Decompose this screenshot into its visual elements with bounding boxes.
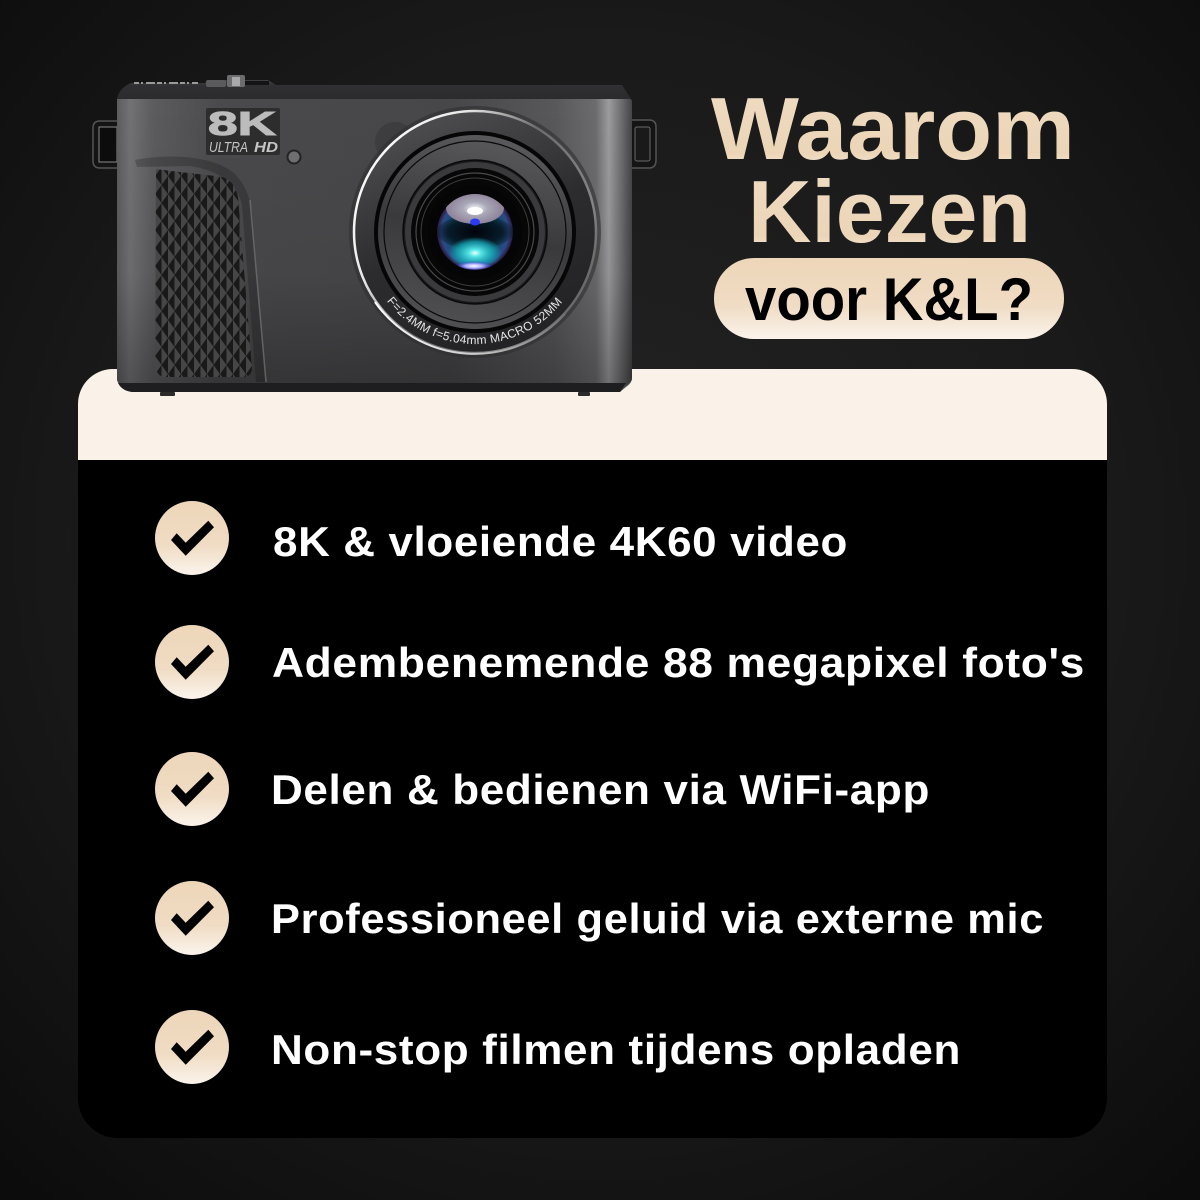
icon: check [155, 1010, 229, 1084]
feature row: non-stop filming [155, 1010, 961, 1084]
feature row: 88 megapixel: Adembenemende 88 megapixel foto's [272, 639, 1085, 686]
feature row: 8K video: 8K & vloeiende 4K60 video [273, 518, 848, 565]
feature row: WiFi app [155, 752, 930, 826]
title [711, 79, 1075, 339]
top controls [117, 75, 631, 99]
lens glass [437, 192, 513, 271]
heading: Waarom: Waarom [711, 79, 1075, 178]
camera body [117, 99, 632, 396]
panel: features card [78, 369, 1107, 1138]
icon: right strap lug [632, 120, 656, 168]
lens specification text: F=2.4MM f=5.04mm MACRO 52MM [387, 296, 562, 344]
feature list [155, 501, 1085, 1084]
badge: 8K Ultra HD [206, 105, 280, 156]
camera [92, 75, 657, 396]
icon: check [155, 501, 229, 575]
grip texture [155, 169, 252, 377]
feature row: external mic: Professioneel geluid via externe mic [271, 895, 1044, 942]
icon: check [155, 625, 229, 699]
icon: indicator light [286, 150, 302, 164]
heading: Kiezen: Kiezen [748, 162, 1031, 261]
icon: check [155, 881, 229, 955]
badge: 8K Ultra HD: HD [254, 139, 278, 156]
feature row: 8K video [155, 501, 848, 575]
pill: voor K&L?: voor K&L? [745, 266, 1033, 333]
feature row: external mic [155, 881, 1044, 955]
feature row: 88 megapixel [155, 625, 1085, 699]
icon: left strap lug [93, 121, 117, 168]
feature row: WiFi app: Delen & bedienen via WiFi-app [271, 766, 930, 813]
badge: 8K Ultra HD: 8K [208, 105, 276, 142]
icon: check [155, 752, 229, 826]
badge: 8K Ultra HD: ULTRA [209, 139, 248, 156]
lens assembly [349, 106, 601, 358]
feature row: non-stop filming: Non-stop filmen tijdens opladen [271, 1026, 961, 1073]
